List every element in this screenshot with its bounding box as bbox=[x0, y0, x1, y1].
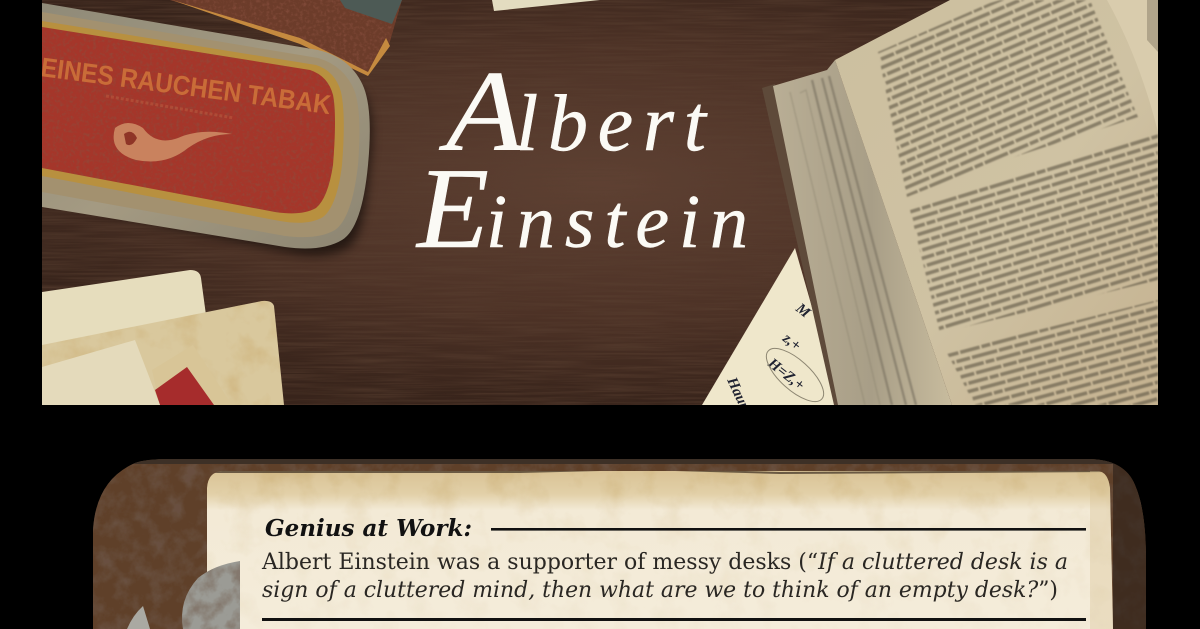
lower rule bbox=[262, 618, 1086, 621]
title line: Albert: lbert bbox=[516, 80, 708, 168]
title line: Albert: A bbox=[438, 48, 525, 176]
book page text bbox=[878, 0, 1158, 405]
icon: pipe bbox=[114, 123, 232, 162]
heading: Genius at Work: Genius at Work: bbox=[265, 515, 472, 542]
note with formulas: Haupt bbox=[723, 374, 755, 418]
hero photo: desk scene bbox=[39, 0, 1158, 418]
body line 2: sign of a cluttered mind, then what are we to think of an empty desk?”) bbox=[262, 578, 1058, 603]
open book bbox=[762, 0, 1158, 405]
paragraph 2 bbox=[910, 133, 1158, 333]
heading rule bbox=[491, 528, 1086, 531]
wooden desk background bbox=[42, 0, 952, 405]
note with formulas: H=Z,+ bbox=[764, 355, 807, 394]
tobacco tin bbox=[39, 3, 372, 255]
title line: Einstein: instein bbox=[486, 180, 748, 264]
note with formulas: M bbox=[792, 300, 813, 322]
old book behind tin bbox=[170, 0, 402, 76]
paragraph 3 bbox=[947, 300, 1158, 405]
torn paper at top bbox=[492, 0, 600, 11]
icon: metal clip bbox=[127, 561, 240, 629]
note with formulas: z,+ bbox=[779, 330, 804, 354]
title line: Einstein: E bbox=[415, 145, 489, 273]
paragraph 1 bbox=[878, 0, 1138, 197]
stack of old letters bbox=[42, 270, 284, 405]
rusty clipboard board bbox=[90, 455, 1150, 629]
tin label lettering: EINES RAUCHEN TABAK bbox=[39, 52, 333, 120]
note with formulas bbox=[702, 248, 834, 405]
paper sheet bbox=[205, 468, 1117, 629]
clipboard panel: Genius at Work bbox=[90, 455, 1150, 629]
body line 1: Albert Einstein was a supporter of messy desks (“If a cluttered desk is a bbox=[261, 550, 1068, 575]
title: Albert Einstein bbox=[415, 73, 746, 248]
